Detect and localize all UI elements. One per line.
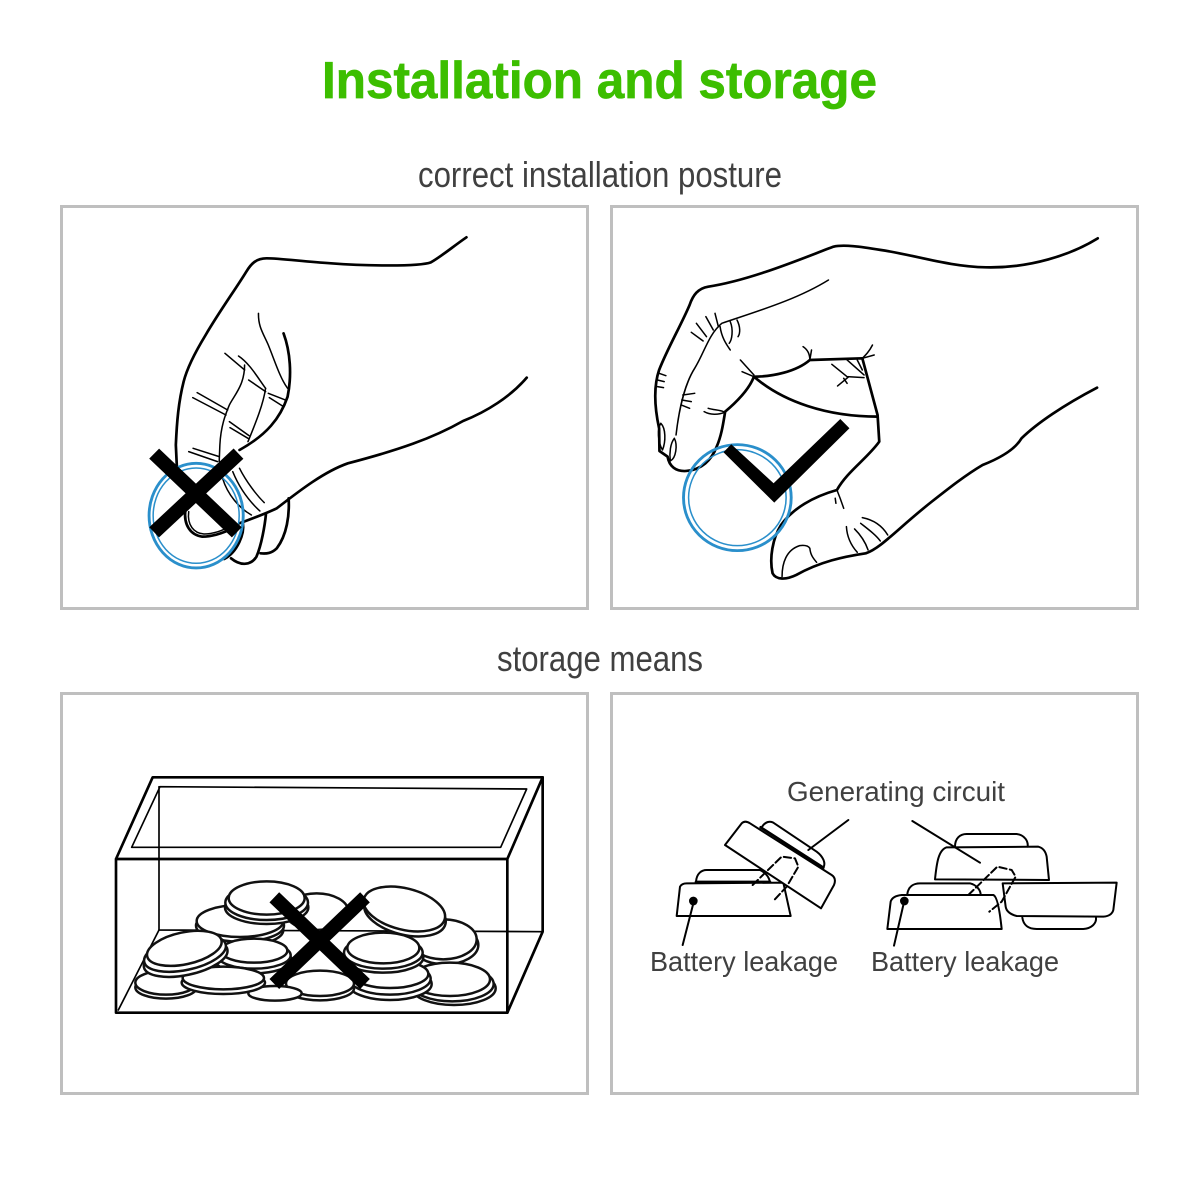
icon: blue battery ring bbox=[149, 463, 243, 568]
marker: leak point right bbox=[900, 897, 909, 905]
panel: correct storage explanation bbox=[612, 694, 1138, 1094]
illustration: hand gripping the battery face bbox=[149, 237, 527, 568]
panel: incorrect storage bbox=[62, 694, 588, 1094]
illustration: hand holding the battery by its edges bbox=[655, 238, 1098, 579]
label: battery leakage left: Battery leakage bbox=[650, 946, 838, 977]
heading: correct installation posture: correct installation posture bbox=[418, 154, 782, 195]
panel: incorrect installation posture bbox=[62, 206, 588, 608]
label: battery leakage right: Battery leakage bbox=[871, 946, 1059, 977]
heading: storage means: storage means bbox=[497, 638, 703, 679]
panel: correct installation posture bbox=[612, 206, 1138, 608]
marker: leak point left bbox=[689, 897, 698, 905]
diagram: two batteries touching, short circuit bbox=[677, 820, 848, 945]
icon: black check mark bbox=[723, 419, 849, 503]
box front edges bbox=[116, 777, 543, 1013]
title: Installation and storage bbox=[322, 52, 877, 110]
icon: blue battery ring bbox=[683, 445, 791, 551]
diagram: three batteries touching, short circuit bbox=[887, 821, 1117, 946]
loose battery pile bbox=[135, 879, 496, 1005]
icon: black cross bbox=[154, 454, 238, 532]
icon: black cross bbox=[274, 897, 365, 984]
illustration: batteries piled in a box bbox=[116, 777, 543, 1013]
box back edges bbox=[118, 787, 543, 1010]
label: generating circuit: Generating circuit bbox=[787, 776, 1005, 807]
